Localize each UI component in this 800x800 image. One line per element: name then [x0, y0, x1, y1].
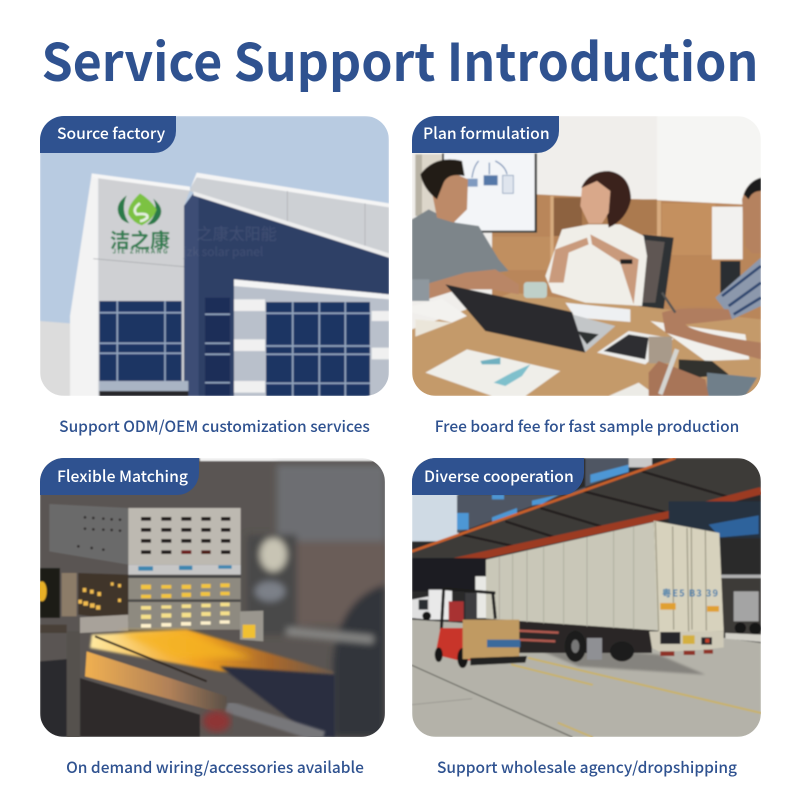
- icon: company logo: 洁之康: [110, 224, 170, 253]
- wooden shelves: [492, 194, 761, 323]
- papers and notebooks: [412, 299, 749, 396]
- caption: source factory: Support ODM/OEM customization services: [59, 415, 370, 437]
- tab: diverse cooperation: Diverse cooperation: [424, 464, 574, 487]
- watermark: jzk solar panel: [182, 243, 263, 260]
- truck: [486, 521, 724, 662]
- tab: diverse cooperation: [412, 458, 584, 495]
- panel: flexible matching: [37, 458, 385, 738]
- caption: diverse cooperation: Support wholesale agency/dropshipping: [437, 756, 737, 778]
- panel: plan formulation: [412, 116, 761, 396]
- forklift: [435, 589, 527, 668]
- tab: flexible matching: [40, 458, 199, 495]
- coffee mug: [524, 282, 547, 298]
- person centre: [545, 171, 647, 306]
- tablet: [597, 331, 674, 364]
- panel: source factory: [40, 116, 389, 396]
- ground: [412, 620, 761, 737]
- person right: [715, 178, 761, 319]
- laptop: [445, 284, 615, 353]
- tab: source factory: Source factory: [57, 121, 166, 144]
- tab: plan formulation: Plan formulation: [423, 121, 550, 144]
- caption: flexible matching: On demand wiring/accessories available: [66, 756, 364, 778]
- icon: company logo: [110, 193, 170, 255]
- title: Service Support Introduction: [42, 21, 758, 96]
- machine housing: [37, 504, 263, 641]
- tab: source factory: [40, 116, 176, 153]
- tab: plan formulation: [412, 116, 559, 153]
- conveyor: [40, 630, 335, 738]
- small white truck: [412, 576, 489, 620]
- office chair: [639, 234, 674, 309]
- tab: flexible matching: Flexible Matching: [57, 464, 188, 487]
- truck number plate text: 粤E5 B3 39: [662, 586, 718, 600]
- hand lower right: [649, 349, 757, 396]
- watermark: [188, 226, 276, 258]
- whiteboard: [442, 153, 537, 233]
- panel: diverse cooperation: [412, 458, 761, 737]
- caption: plan formulation: Free board fee for fast sample production: [435, 415, 739, 437]
- icon: company logo: JIE ZHIKANG: [112, 246, 168, 255]
- arms right: [662, 293, 761, 359]
- factory windows: [99, 298, 370, 396]
- watermark: 之康太阳能: [197, 220, 277, 244]
- person left: [412, 159, 519, 301]
- table: [412, 293, 761, 396]
